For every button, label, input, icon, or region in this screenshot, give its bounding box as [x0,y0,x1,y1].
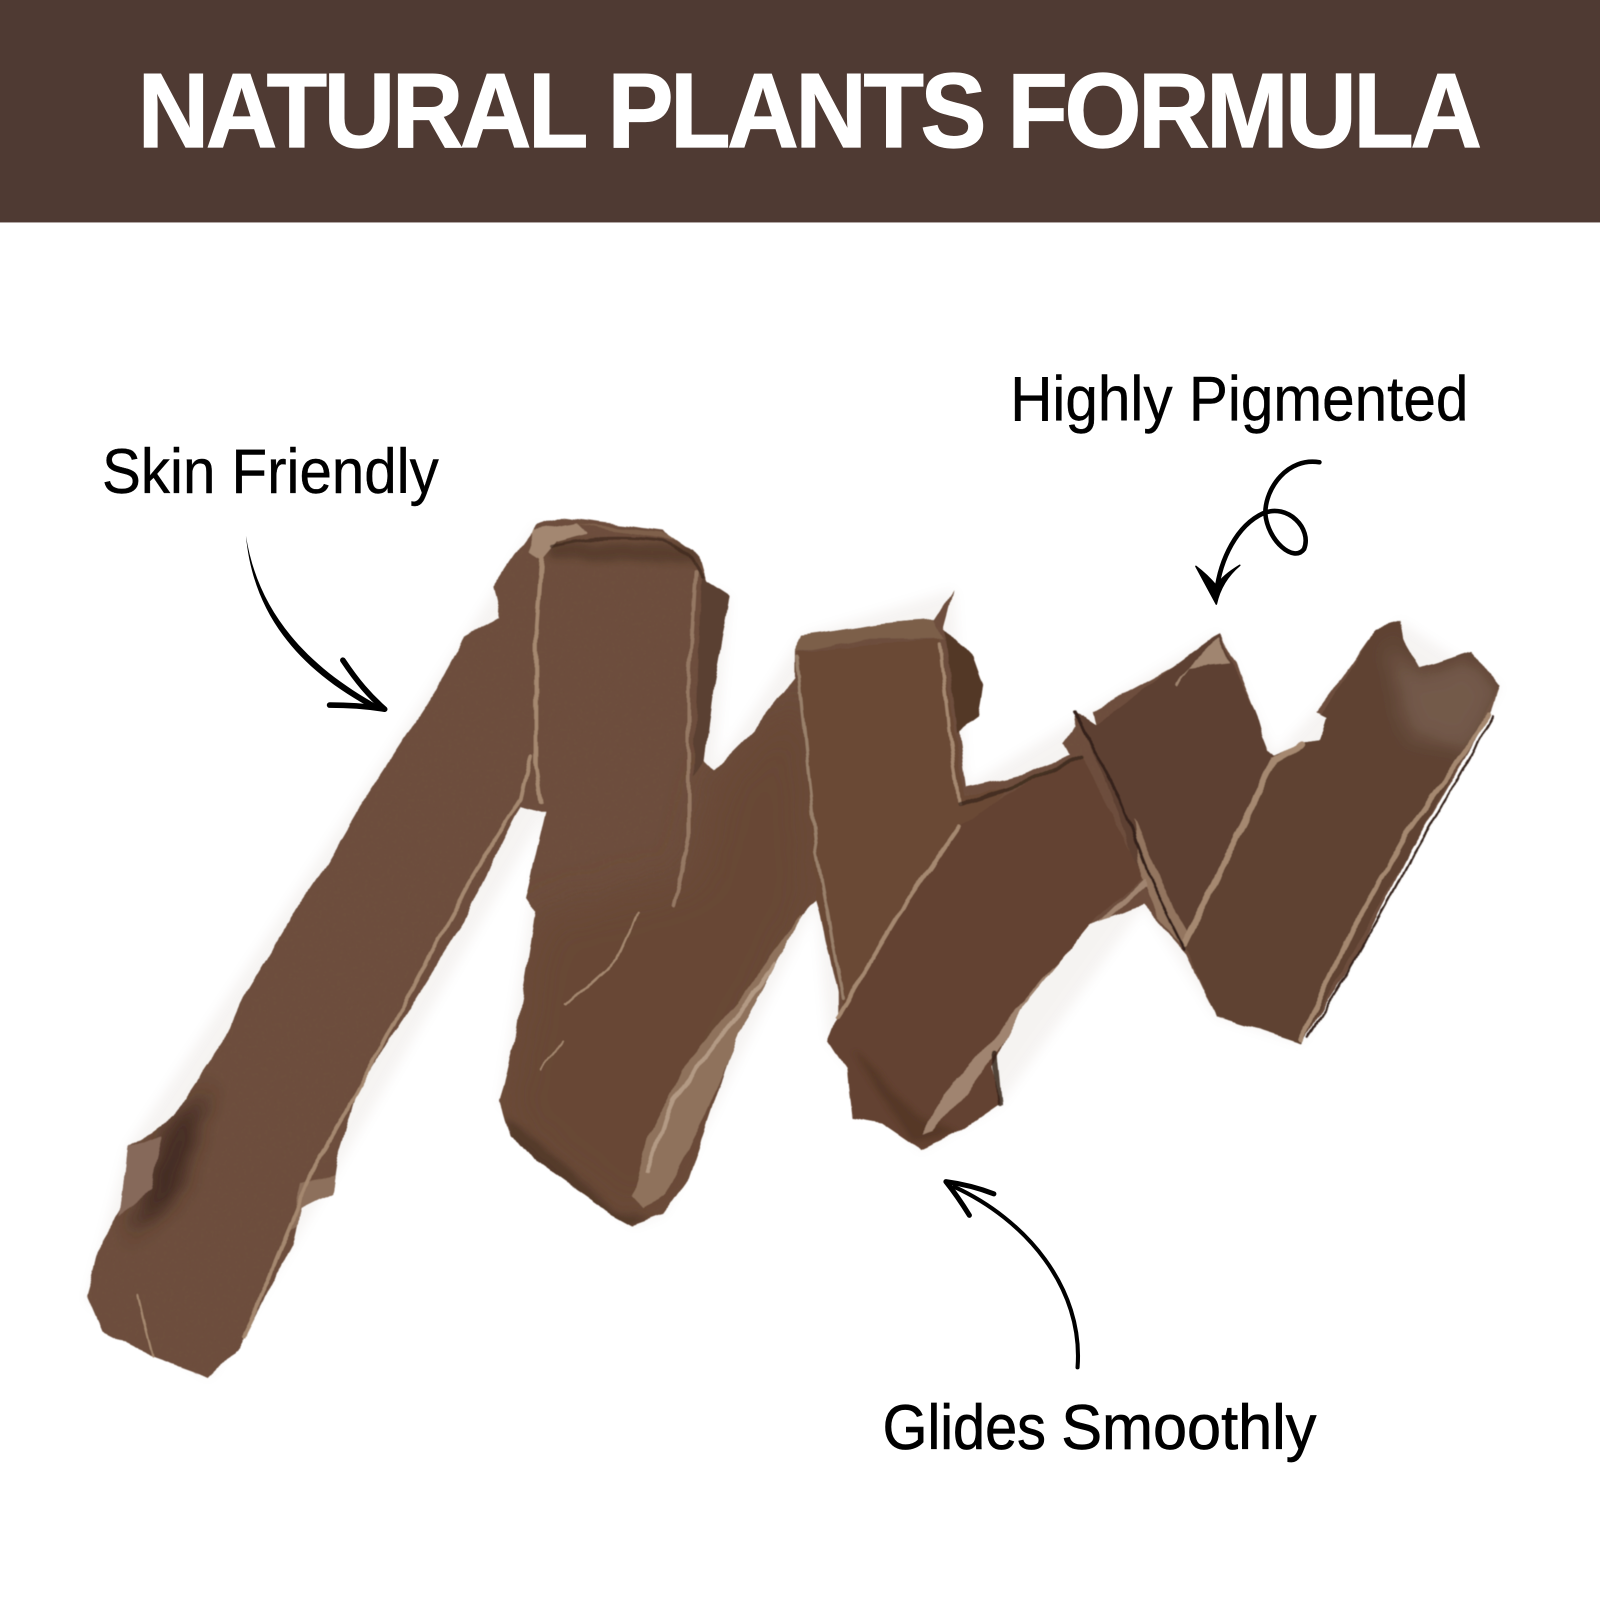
stroke 3 top lip [795,619,944,653]
light tan smear ridges [138,556,1490,1357]
dark shadow, lower left [128,1087,209,1240]
lower-left bump [119,1136,163,1216]
dark shadow under top lip [546,541,702,563]
wedge between strokes 5 and 6 [1134,818,1189,947]
arrow: Highly Pigmented pointer [1196,462,1319,604]
header band [0,0,1600,222]
stroke 3 dark bulge [944,624,984,733]
title: NATURAL PLANTS FORMULA [138,52,1479,170]
stroke 6 faded tip [1388,643,1500,750]
label: Glides Smoothly [883,1393,1317,1463]
top highlight of stroke 2 [529,522,587,559]
dark band beside stroke 2 [694,571,730,776]
stroke 6 tone [1185,621,1500,1043]
dark crease lines [551,538,1494,1104]
label: Glides Smoothly: Glides [883,1393,1046,1463]
right-side bump [291,1176,337,1230]
arrow: Skin Friendly pointer [246,536,385,710]
glossy highlight patch [633,916,806,1209]
stroke 5 tone [1073,634,1274,944]
label: Skin Friendly: Skin Friendly [102,437,439,507]
stroke 4 lower wedge [923,878,1145,1135]
stroke 3 tone [824,790,1004,928]
label: Highly Pigmented: Highly Pigmented [1010,364,1468,434]
dark base shading [505,1117,653,1230]
shaded stroke tones [118,523,1500,1234]
label: Glides Smoothly: Smoothly [1061,1393,1317,1463]
smear base shape [87,517,1500,1378]
stroke 4 tone [829,755,1144,1150]
stroke 5 tip highlight [1173,638,1230,686]
stroke 2 lower tone [500,684,819,1219]
brown cosmetic smear swatch [71,510,1510,1388]
arrow: Glides Smoothly pointer [946,1182,1078,1367]
